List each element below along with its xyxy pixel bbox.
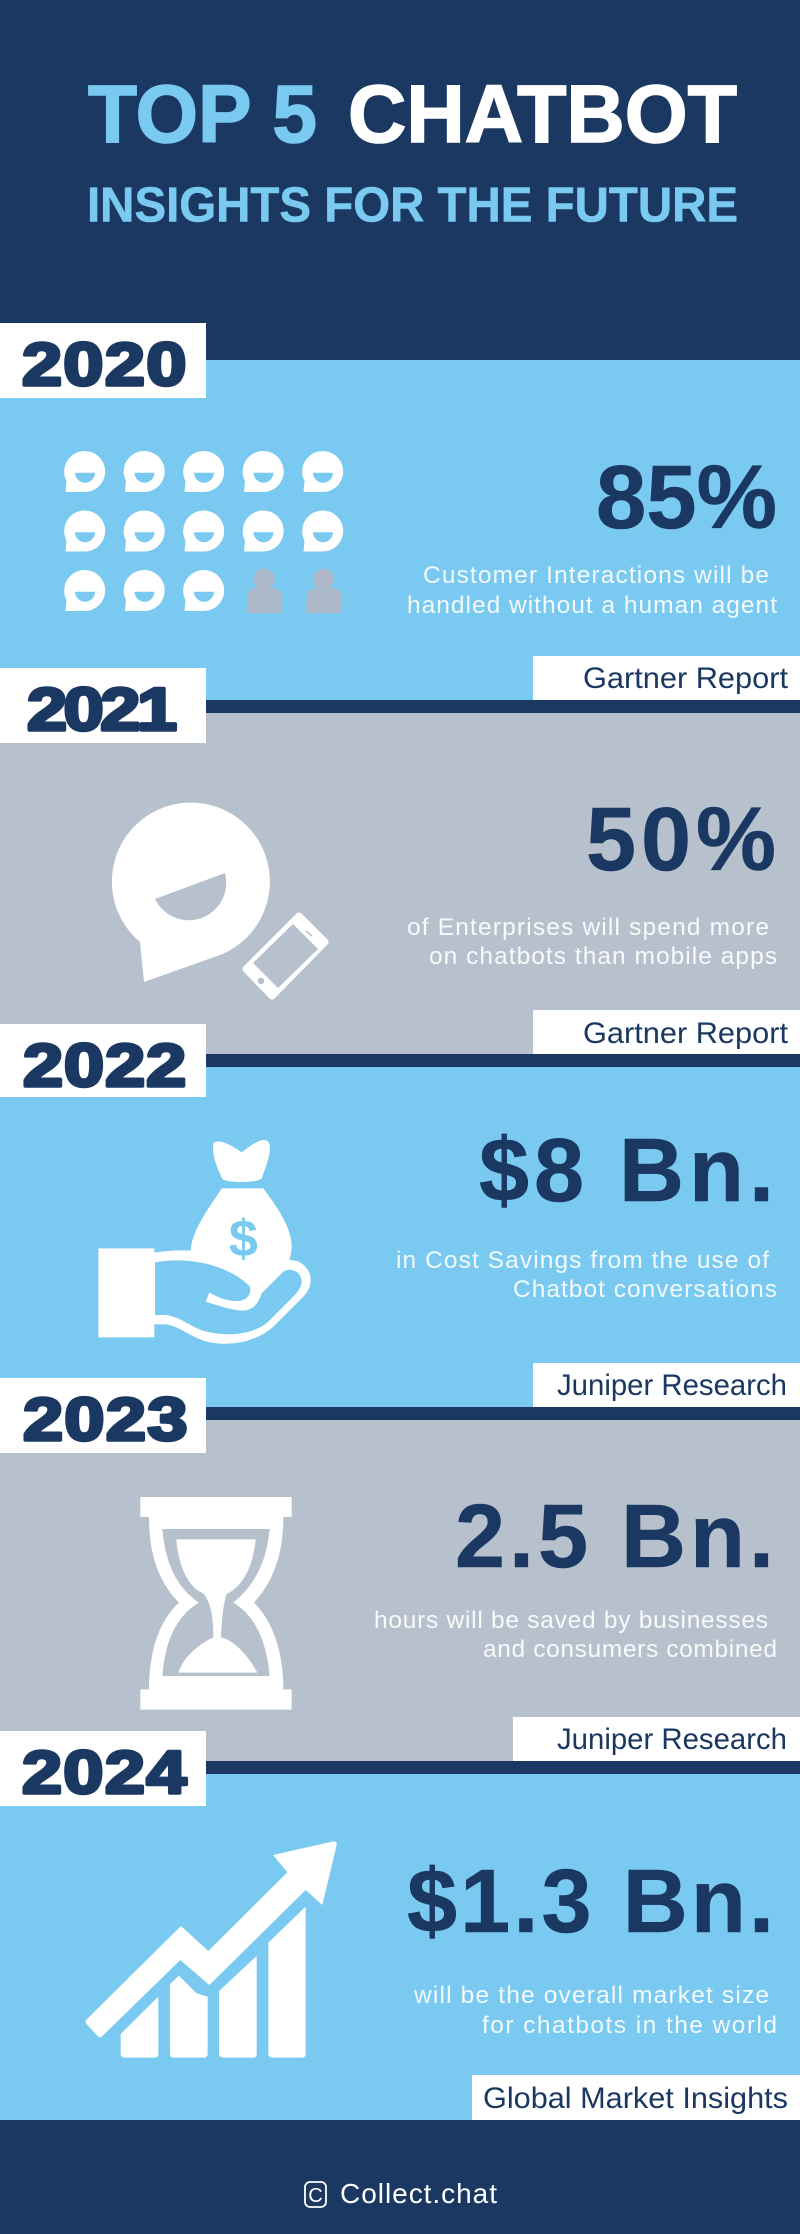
panel: 2024 [0, 1731, 800, 2120]
description: in Cost Savings from the use of [396, 1247, 769, 1274]
description: for chatbots in the world [482, 2012, 777, 2039]
description [396, 1247, 777, 1303]
icon: copyright mark: C [308, 2185, 323, 2207]
panel: 2021 [0, 668, 800, 1054]
description: on chatbots than mobile apps [429, 943, 777, 970]
source: Gartner Report [533, 656, 800, 700]
year label: 2023: 2023 [23, 1387, 187, 1454]
panel: 2023 [0, 1378, 800, 1761]
statistic: 2.5 Bn.: 2.5 Bn. [455, 1487, 774, 1587]
footer panel [0, 2120, 800, 2234]
icon: growth chart with arrow [86, 1841, 337, 2058]
icon: hand holding money bag: $ [229, 1210, 258, 1268]
statistic: 50%: 50% [586, 790, 776, 890]
description [407, 914, 777, 970]
year label: 2021 [0, 668, 206, 744]
year label: 2024: 2024 [22, 1740, 187, 1807]
description: handled without a human agent [407, 592, 777, 619]
year label: 2021: 2021 [27, 677, 177, 744]
description: will be the overall market size [413, 1982, 769, 2009]
title: TOP 5 [88, 69, 317, 160]
source: Gartner Report: Gartner Report [583, 662, 789, 695]
source: Global Market Insights [472, 2075, 800, 2120]
description [413, 1982, 777, 2039]
icon: hand holding money bag [98, 1140, 311, 1344]
description [374, 1607, 777, 1663]
statistic: $1.3 Bn.: $1.3 Bn. [407, 1852, 774, 1952]
icon: chat bubble [112, 803, 270, 982]
source: Juniper Research [513, 1717, 800, 1761]
year label: 2020: 2020 [22, 332, 186, 399]
source: Juniper Research: Juniper Research [557, 1723, 787, 1756]
icon: pictogram of chat bubbles and people [64, 451, 343, 613]
description: Customer Interactions will be [423, 562, 769, 589]
description: hours will be saved by businesses [374, 1607, 768, 1634]
description: of Enterprises will spend more [407, 914, 769, 941]
title [88, 69, 737, 160]
icon: copyright mark [305, 2182, 326, 2207]
source: Gartner Report [533, 1010, 800, 1054]
header panel [0, 0, 800, 360]
icon: mobile phone [246, 916, 325, 996]
statistic: 85%: 85% [596, 448, 777, 548]
subtitle: INSIGHTS FOR THE FUTURE [87, 178, 738, 232]
brand name: Collect.chat [340, 2178, 497, 2209]
title: CHATBOT [348, 69, 737, 160]
source: Juniper Research: Juniper Research [557, 1369, 787, 1402]
source: Global Market Insights: Global Market Insights [483, 2082, 788, 2115]
description: and consumers combined [483, 1636, 777, 1663]
panel: 2020 [0, 323, 800, 700]
description: Chatbot conversations [513, 1276, 777, 1303]
source: Juniper Research [533, 1363, 800, 1407]
year label: 2022: 2022 [23, 1033, 186, 1100]
source: Gartner Report: Gartner Report [583, 1017, 789, 1050]
panel: 2022 [0, 1024, 800, 1407]
icon: hourglass [140, 1497, 292, 1710]
statistic: $8 Bn.: $8 Bn. [479, 1121, 774, 1221]
description [407, 562, 777, 619]
